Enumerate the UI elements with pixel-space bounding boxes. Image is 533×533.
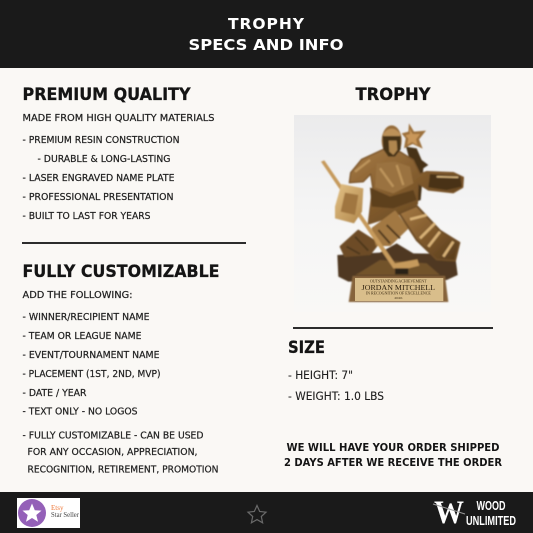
usage note: RECOGNITION, RETIREMENT, PROMOTION [28,464,218,476]
plaque base [349,276,448,302]
base [337,243,458,282]
customization list: - EVENT/TOURNAMENT NAME [22,350,160,361]
customization list: - TEAM OR LEAGUE NAME [22,331,142,342]
header band [0,0,533,68]
panel: size [288,338,384,403]
name plate: 2026 [394,296,403,300]
header title: SPECS AND INFO [188,36,344,54]
customization list [22,312,160,418]
feature list: - BUILT TO LAST FOR YEARS [22,211,150,222]
feature list: - DURABLE & LONG-LASTING [38,154,170,165]
header title [188,15,344,54]
weight: - WEIGHT: 1.0 LBS [288,389,384,403]
header title: TROPHY [228,15,305,33]
feature list [22,135,180,222]
stick [321,160,419,268]
head [382,125,402,156]
heading: trophy: TROPHY [356,85,431,105]
wood unlimited logo [433,495,516,531]
feature list: - PREMIUM RESIN CONSTRUCTION [22,135,180,146]
usage note: - FULLY CUSTOMIZABLE - CAN BE USED [22,430,204,442]
wood unlimited logo: W [434,495,464,531]
shipping note: WE WILL HAVE YOUR ORDER SHIPPED [286,441,500,454]
customization list: - TEXT ONLY - NO LOGOS [22,406,138,418]
footer band [0,492,533,533]
heading: size: SIZE [288,338,325,358]
wood unlimited logo: UNLIMITED [466,514,516,528]
icon: star outline [248,506,266,523]
blocker [335,184,363,223]
intro text: MADE FROM HIGH QUALITY MATERIALS [22,113,215,124]
star [402,123,426,149]
name plate: IN RECOGNITION OF EXCELLENCE [366,292,432,296]
star seller badge [17,498,80,528]
name plate [355,278,443,301]
wood unlimited logo: WOOD [476,499,506,513]
intro text: ADD THE FOLLOWING: [22,290,132,301]
usage note [22,430,218,476]
heading: fully customizable: FULLY CUSTOMIZABLE [22,262,220,282]
leg pads [341,231,378,256]
usage note: FOR ANY OCCASION, APPRECIATION, [28,447,198,458]
torso and arms [349,149,463,224]
panel: fully customizable [22,262,220,476]
star seller badge: Star Seller [51,511,80,519]
shipping note [284,441,502,469]
customization list: - WINNER/RECIPIENT NAME [22,312,150,323]
customization list: - DATE / YEAR [22,388,87,399]
name plate: JORDAN MITCHELL [362,283,435,292]
height: - HEIGHT: 7" [288,368,353,382]
trophy photo [294,115,491,312]
feature list: - LASER ENGRAVED NAME PLATE [22,173,174,184]
heading: premium quality: PREMIUM QUALITY [22,85,191,105]
name plate: OUTSTANDING ACHIEVEMENT [370,280,427,284]
shipping note: 2 DAYS AFTER WE RECEIVE THE ORDER [284,456,502,469]
feature list: - PROFESSIONAL PRESENTATION [22,192,174,203]
panel: premium quality [22,85,215,222]
star seller badge: Etsy [51,504,64,512]
customization list: - PLACEMENT (1ST, 2ND, MVP) [22,369,160,380]
